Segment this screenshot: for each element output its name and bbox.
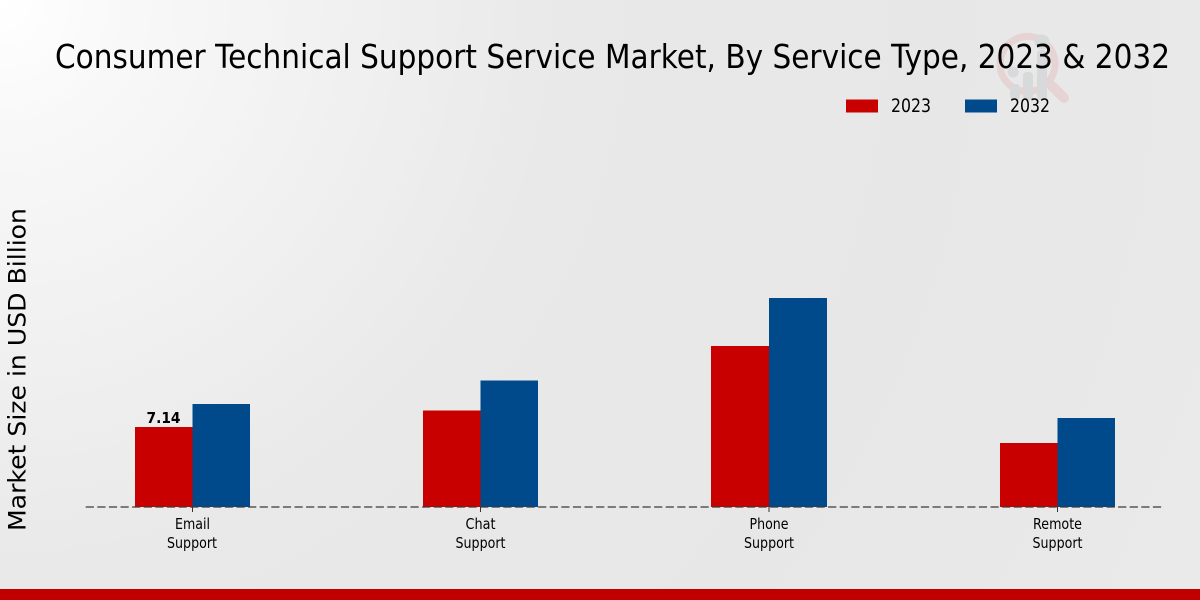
x-axis label: Remote Support: Support [1032, 534, 1083, 552]
x-axis label: Email Support: Support [167, 534, 217, 552]
bars: Email Support [135, 404, 250, 507]
x-axis label: Email Support: Email [175, 515, 210, 533]
x-axis baseline [86, 506, 1164, 508]
tick marks [192, 507, 1058, 512]
bars: Chat Support [423, 380, 538, 507]
y-axis title: Market Size in USD Billion [4, 208, 32, 531]
bars: Remote Support [1000, 418, 1115, 507]
legend item: 2032 [965, 96, 1050, 117]
x-axis label: Phone Support [744, 515, 794, 552]
x-axis label: Chat Support: Chat [466, 515, 496, 533]
legend [846, 96, 1050, 117]
data label: 7.14: 7.14 [146, 409, 180, 427]
legend item: 2023: 2023 [891, 96, 931, 117]
icon: watermark magnifier with bars [1000, 34, 1064, 100]
x-axis label: Remote Support: Remote [1033, 515, 1082, 533]
x-axis label: Chat Support: Support [456, 534, 506, 552]
x-axis label: Phone Support: Phone [750, 515, 788, 533]
legend item: 2032: 2032 [1010, 96, 1050, 117]
x-axis label: Remote Support [1032, 515, 1083, 552]
bars: Phone Support [711, 298, 827, 507]
footer bar [0, 589, 1200, 600]
legend item: 2023 [846, 96, 931, 117]
x-axis label: Email Support [167, 515, 217, 552]
x-axis label: Phone Support: Support [744, 534, 794, 552]
x-axis label: Chat Support [456, 515, 506, 552]
bar chart [86, 298, 1164, 512]
